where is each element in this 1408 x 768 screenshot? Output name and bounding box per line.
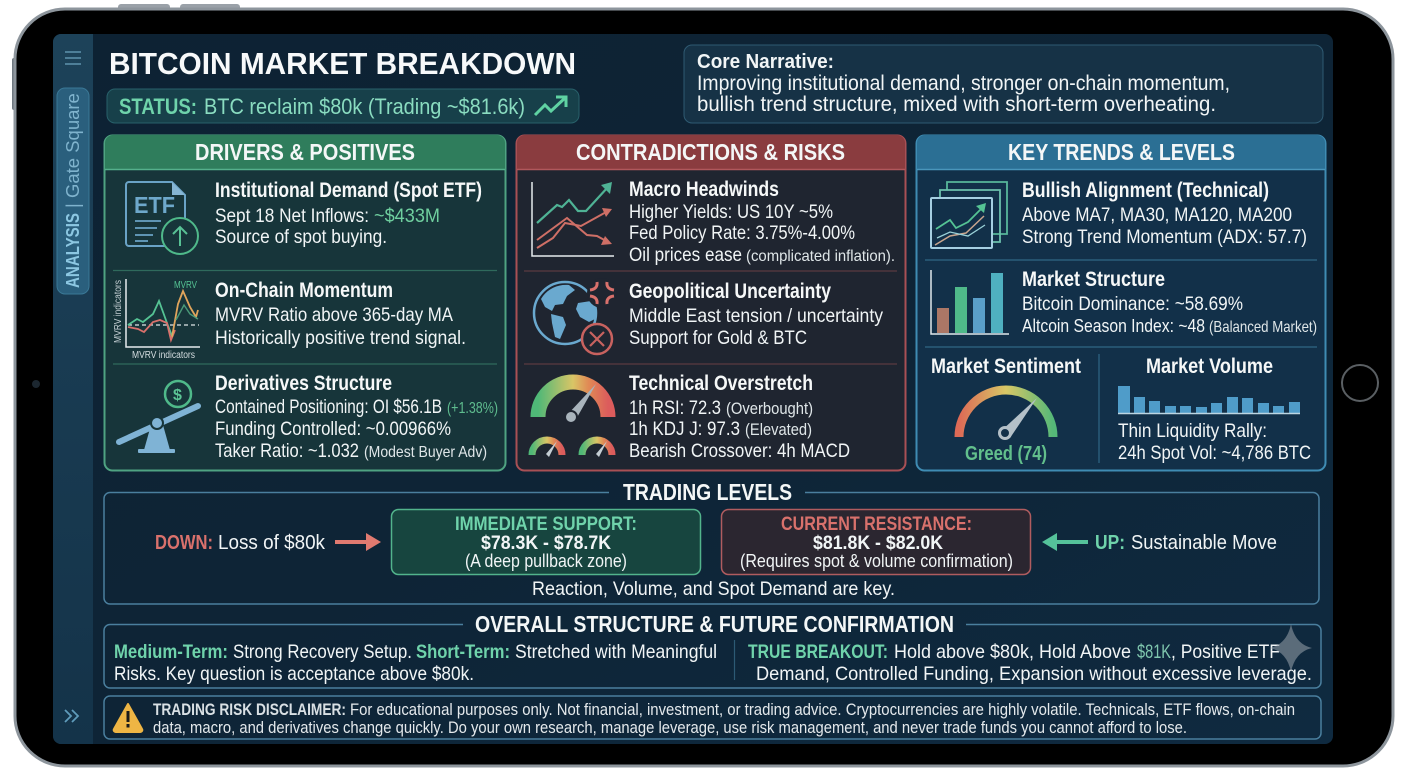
text: institutional demand: ~$433M — [374, 205, 440, 227]
status pill — [107, 89, 579, 123]
support box: IMMEDIATE SUPPORT: — [455, 513, 637, 535]
icon: warning triangle — [114, 704, 142, 732]
panel: drivers and positives — [104, 135, 506, 470]
sidebar — [53, 34, 93, 744]
market volume chart — [1118, 355, 1311, 464]
text: market structure: Market Structure — [1022, 268, 1165, 291]
core narrative box: Improving institutional demand, stronger on-chain momentum, — [697, 72, 1230, 95]
title: BITCOIN MARKET BREAKDOWN — [109, 46, 576, 81]
text: geopolitical uncertainty — [629, 280, 883, 349]
text: on-chain momentum: Historically positive trend signal. — [215, 327, 466, 349]
label: down: DOWN: — [155, 531, 213, 554]
text: macro headwinds: Macro Headwinds — [629, 178, 779, 201]
text: geopolitical uncertainty: Geopolitical Uncertainty — [629, 280, 831, 303]
text: true breakout — [748, 641, 1312, 685]
chart: MVRV indicators: MVRV indicators — [113, 280, 124, 343]
resistance box — [722, 510, 1030, 574]
text: market structure: (Balanced Market) — [1209, 319, 1317, 336]
icon: stacked chart cards — [931, 182, 1007, 248]
text: medium and short term: Strong Recovery Setup. — [233, 641, 412, 663]
text: derivatives structure: Funding Controlled: ~0.00966% — [215, 418, 451, 440]
disclaimer text: TRADING RISK DISCLAIMER: — [153, 700, 346, 719]
disclaimer text: data, macro, and derivatives change quickly. Do your own research, manage leverage, use risk management, and never trade funds you cannot afford to lose. — [153, 718, 1187, 737]
note: Reaction, Volume, and Spot Demand are key. — [532, 578, 895, 600]
section: overall structure — [104, 611, 1321, 688]
market volume chart: Market Volume — [1146, 355, 1273, 378]
text: on-chain momentum: MVRV Ratio above 365-day MA — [215, 304, 453, 326]
text: bullish alignment: Above MA7, MA30, MA120, MA200 — [1022, 204, 1292, 226]
disclaimer text — [153, 700, 1295, 737]
text: bullish alignment: Strong Trend Momentum (ADX: 57.7) — [1022, 226, 1307, 248]
support box: $78.3K - $78.7K — [481, 532, 611, 554]
status pill: STATUS: — [119, 94, 197, 119]
text: medium and short term: Medium-Term: — [114, 641, 228, 663]
label: down: Loss of $80k — [218, 531, 326, 554]
text: true breakout: Hold above $80k, Hold Above — [894, 641, 1131, 663]
text: bullish alignment — [1022, 179, 1307, 248]
icon: balance scale with coin: $ — [173, 387, 182, 404]
core narrative box: bullish trend structure, mixed with short-term overheating. — [697, 93, 1216, 116]
chart: MVRV indicators: MVRV indicators — [132, 350, 195, 361]
text: institutional demand: Institutional Demand (Spot ETF) — [215, 179, 482, 202]
text: macro headwinds: Fed Policy Rate: 3.75%-4.00% — [629, 222, 855, 244]
text: technical overstretch — [629, 372, 850, 462]
text: derivatives structure: (+1.38%) — [447, 400, 498, 417]
status pill: BTC reclaim $80k (Trading ~$81.6k) — [204, 94, 525, 119]
chart: macro lines — [532, 182, 614, 256]
text: medium and short term — [114, 641, 717, 685]
text: macro headwinds: Higher Yields: US 10Y ~5% — [629, 201, 833, 223]
text: true breakout: $81K — [1137, 641, 1171, 663]
core narrative box: Core Narrative: — [697, 50, 834, 73]
icon: menu — [65, 52, 81, 64]
chart: MVRV indicators — [113, 279, 200, 361]
text: market structure — [1022, 268, 1317, 336]
text: derivatives structure: Taker Ratio: ~1.032 — [215, 440, 359, 462]
text: bullish alignment: Bullish Alignment (Technical) — [1022, 179, 1269, 202]
arrow: left to resistance — [1042, 533, 1088, 551]
resistance box: CURRENT RESISTANCE: — [781, 513, 972, 535]
text: true breakout: Demand, Controlled Funding, Expansion without excessive leverage. — [756, 663, 1312, 685]
text: technical overstretch: 1h RSI: 72.3 — [629, 397, 721, 419]
text: medium and short term: Risks. Key question is acceptance above $80k. — [114, 663, 474, 685]
market sentiment gauge: Greed (74) — [965, 442, 1047, 465]
core narrative box — [684, 45, 1323, 123]
sidebar label: ANALYSIS| Gate Square — [62, 93, 83, 288]
text: macro headwinds: Oil prices ease — [629, 244, 742, 266]
support box: (A deep pullback zone) — [465, 550, 627, 571]
text: geopolitical uncertainty: Support for Gold & BTC — [629, 327, 807, 349]
text: true breakout: , Positive ETF — [1171, 641, 1280, 663]
text: technical overstretch: (Elevated) — [745, 420, 812, 439]
text: medium and short term: Short-Term: — [416, 641, 510, 663]
market sentiment gauge: Market Sentiment — [931, 355, 1081, 378]
text: institutional demand — [215, 179, 482, 248]
panel: key trends and levels — [916, 135, 1326, 470]
chart: MVRV indicators: MVRV — [174, 280, 197, 291]
text: derivatives structure: Derivatives Structure — [215, 372, 392, 395]
heading: OVERALL STRUCTURE & FUTURE CONFIRMATION — [475, 611, 954, 637]
text: true breakout: TRUE BREAKOUT: — [748, 641, 888, 663]
text: derivatives structure: (Modest Buyer Adv) — [364, 444, 487, 461]
text: on-chain momentum — [215, 279, 466, 349]
disclaimer box — [104, 696, 1321, 739]
icon: balance scale with coin — [119, 381, 198, 453]
text: macro headwinds — [629, 178, 895, 266]
icon: sparkle watermark — [1270, 624, 1312, 672]
text: technical overstretch: (Overbought) — [726, 399, 813, 418]
text: medium and short term: Stretched with Meaningful — [515, 641, 717, 663]
text: technical overstretch: Technical Overstretch — [629, 372, 813, 395]
heading: CONTRADICTIONS & RISKS — [576, 139, 845, 165]
icon: globe with conflict symbols — [534, 278, 617, 354]
label: up: Sustainable Move — [1131, 531, 1277, 554]
market volume chart: Thin Liquidity Rally: — [1118, 420, 1267, 442]
label: up: UP: — [1095, 531, 1125, 554]
text: on-chain momentum: On-Chain Momentum — [215, 279, 393, 302]
chart: market structure bars — [931, 270, 1009, 334]
support box — [392, 510, 700, 574]
heading: KEY TRENDS & LEVELS — [1008, 139, 1235, 165]
market volume chart: 24h Spot Vol: ~4,786 BTC — [1118, 442, 1311, 464]
icon: expand chevrons — [65, 710, 78, 722]
sidebar tab — [57, 88, 89, 294]
text: macro headwinds: (complicated inflation). — [746, 248, 895, 265]
text: technical overstretch: 1h KDJ J: 97.3 — [629, 418, 740, 440]
text: market structure: Bitcoin Dominance: ~58.69% — [1022, 293, 1243, 315]
market sentiment gauge — [931, 355, 1081, 465]
panel: contradictions and risks — [516, 135, 906, 470]
text: technical overstretch: Bearish Crossover: 4h MACD — [629, 440, 850, 462]
heading: DRIVERS & POSITIVES — [195, 139, 415, 165]
icon: trend up arrow — [535, 97, 566, 115]
resistance box: $81.8K - $82.0K — [813, 532, 943, 554]
icon: ETF document: ETF — [134, 192, 175, 218]
label: down — [155, 531, 326, 554]
section: trading levels — [104, 479, 1319, 604]
text: derivatives structure — [215, 372, 498, 462]
arrow: right to support — [335, 533, 381, 551]
icon: ETF document — [126, 182, 198, 254]
text: geopolitical uncertainty: Middle East tension / uncertainty — [629, 305, 883, 327]
icon: overstretch gauges — [532, 382, 612, 457]
text: derivatives structure: Contained Positioning: OI $56.1B — [215, 396, 442, 418]
heading: TRADING LEVELS — [623, 479, 792, 505]
resistance box: (Requires spot & volume confirmation) — [740, 550, 1013, 571]
text: institutional demand: Source of spot buying. — [215, 226, 387, 248]
text: market structure: Altcoin Season Index: ~48 — [1022, 315, 1205, 336]
disclaimer text: For educational purposes only. Not financial, investment, or trading advice. Cryptocurrencies are highly volatile. Technicals, ETF flows, on-chain — [350, 700, 1295, 719]
text: institutional demand: Sept 18 Net Inflows: — [215, 205, 369, 227]
